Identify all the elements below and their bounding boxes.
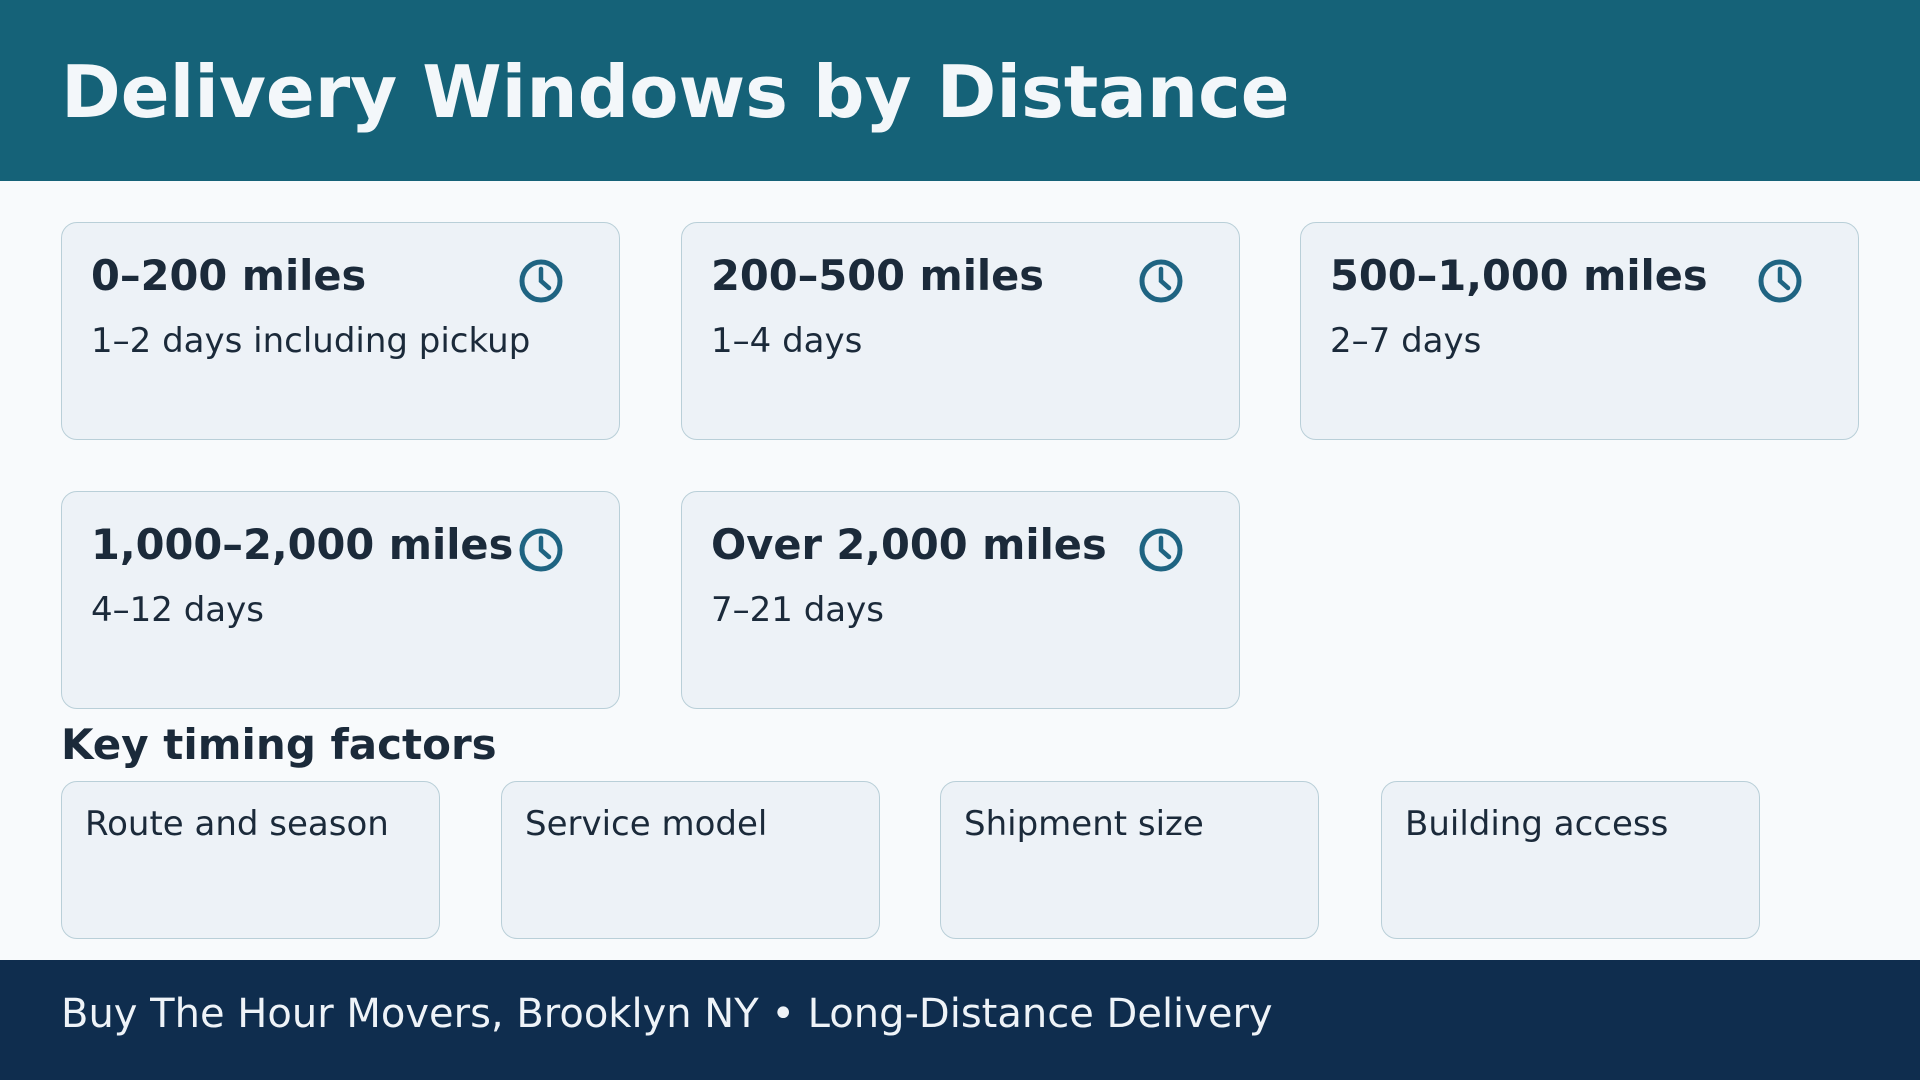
factor: route and season [61,781,440,939]
factor: service model: Service model [525,804,767,844]
footer [0,960,1920,1080]
card: 0-200 miles [61,222,620,440]
card: 1000-2000 miles [61,491,620,709]
card title: 1,000–2,000 miles [91,520,513,569]
icon: clock [1140,528,1182,572]
factor: building access: Building access [1405,804,1668,844]
icon: clock [520,260,562,302]
card subtitle: 1–2 days including pickup [91,321,530,361]
icon: clock [1140,260,1182,302]
title: Delivery Windows by Distance [61,50,1290,134]
card title: 500–1,000 miles [1330,251,1708,300]
factor: shipment size: Shipment size [964,804,1204,844]
card subtitle: 2–7 days [1330,321,1481,361]
card subtitle: 7–21 days [711,590,884,630]
card subtitle: 1–4 days [711,321,862,361]
icon: clock [520,528,562,572]
heading: key timing factors: Key timing factors [61,720,497,769]
card: 500-1000 miles [1300,222,1859,440]
factor: service model [501,781,880,939]
footer text: Buy The Hour Movers, Brooklyn NY • Long-Distance Delivery [61,991,1273,1037]
header [0,0,1920,181]
icon: clock [1758,260,1802,302]
factor: shipment size [940,781,1319,939]
card title: Over 2,000 miles [711,520,1107,569]
card subtitle: 4–12 days [91,590,264,630]
factor: building access [1381,781,1760,939]
card: 200-500 miles [681,222,1240,440]
factor: route and season: Route and season [85,804,389,844]
card title: 0–200 miles [91,251,366,300]
card title: 200–500 miles [711,251,1044,300]
card: over 2000 miles [681,491,1240,709]
